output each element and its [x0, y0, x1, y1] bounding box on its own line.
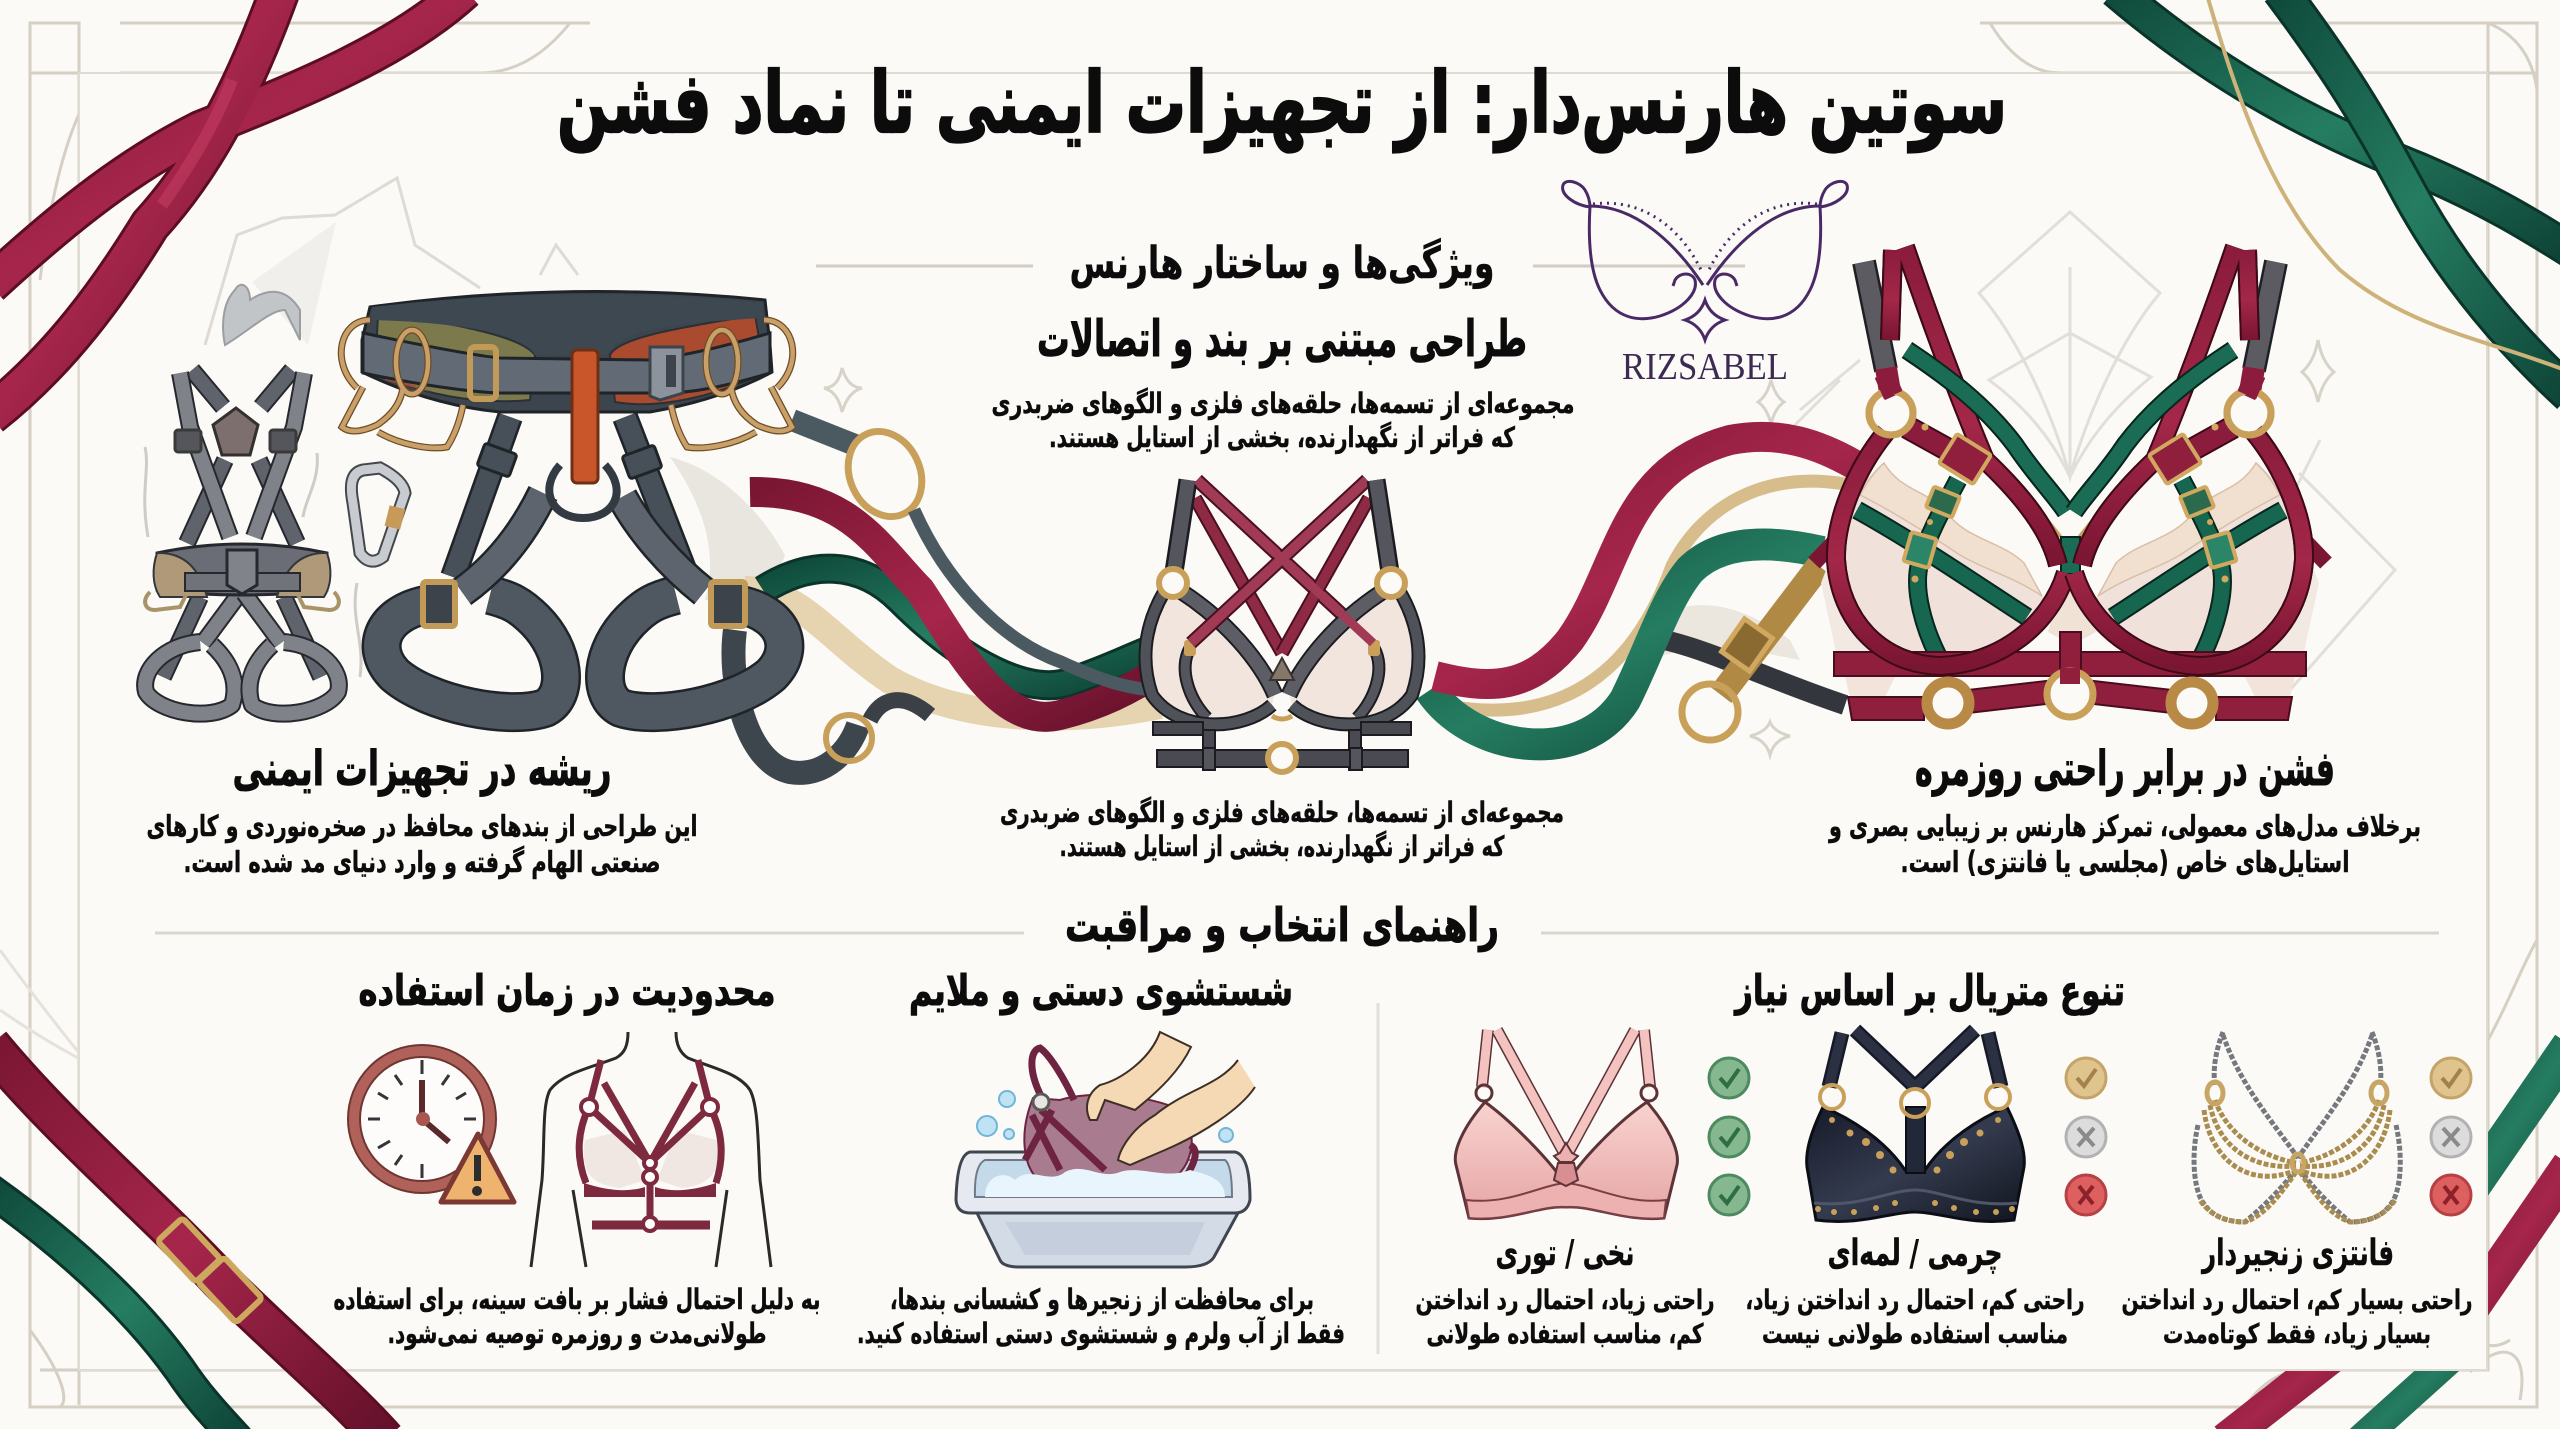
re-drawn underwire over bands [1836, 247, 2304, 666]
leg straps and loops [382, 417, 784, 712]
description: راحتی زیاد، احتمال رد انداختن [1416, 1285, 1714, 1316]
description: این طراحی از بندهای محافظ در صخره‌نوردی و کارهای [146, 809, 698, 843]
logo: Rizsabel [1563, 181, 1847, 388]
block: gentle hand wash [857, 966, 1345, 1350]
block: center caption [1000, 796, 1564, 863]
illustration: main crimson and green harness bra [1814, 247, 2326, 724]
description [1828, 809, 2421, 879]
description: مجموعه‌ای از تسمه‌ها، حلقه‌های فلزی و الگوهای ضربدری [992, 387, 1574, 420]
description: که فراتر از نگهدارنده، بخشی از استایل هستند. [1049, 421, 1516, 454]
label: نخی / توری [1496, 1233, 1634, 1274]
description: صنعتی الهام گرفته و وارد دنیای مد شده است. [184, 845, 660, 879]
illustration: black leather studded bra [1807, 1030, 2024, 1221]
block: roots in safety equipment [146, 741, 698, 879]
description: به دلیل احتمال فشار بر بافت سینه، برای استفاده [334, 1283, 820, 1316]
heading: محدودیت در زمان استفاده [358, 966, 776, 1016]
description [1746, 1285, 2084, 1350]
geometric diamond backdrop [1790, 212, 2395, 690]
illustration: full body harness [145, 370, 339, 714]
block: center caption: که فراتر از نگهدارنده، بخشی از استایل هستند. [1060, 830, 1505, 863]
flowing ribbons right: fashion strand [1430, 437, 1855, 744]
title: سوتین هارنس‌دار: از تجهیزات ایمنی تا نماد فشن [557, 54, 2007, 153]
illustration: fantasy chain bra [2194, 1032, 2400, 1222]
mountain sketch backdrop [145, 178, 578, 677]
description: فقط از آب ولرم و شستشوی دستی استفاده کنید. [857, 1316, 1345, 1350]
waist belt [341, 291, 793, 483]
heading: ریشه در تجهیزات ایمنی [232, 741, 612, 797]
heading: material variety: تنوع متریال بر اساس نیاز [1734, 966, 2125, 1016]
illustration: clock with warning sign [354, 1051, 514, 1202]
comfort icons: chain bra [2431, 1058, 2471, 1215]
illustration: center harness bra [1146, 480, 1418, 772]
block: leather [1746, 1233, 2084, 1350]
description: کم، مناسب استفاده طولانی [1426, 1319, 1704, 1350]
icon: gold belt buckle [157, 1218, 262, 1323]
description [1416, 1285, 1714, 1350]
icon: small sparkles [824, 340, 2334, 755]
illustration: large climbing harness [341, 291, 793, 712]
section divider lines [155, 266, 2439, 1354]
heading: features and structure: ویژگی‌ها و ساختار هارنس [1070, 237, 1494, 289]
gold gear loops [341, 320, 793, 448]
description [2122, 1285, 2472, 1350]
illustration: hand wash basin [956, 1032, 1255, 1267]
ribbon: green top right [2115, 0, 2560, 395]
description [334, 1283, 820, 1350]
description: طولانی‌مدت و روزمره توصیه نمی‌شود. [388, 1317, 766, 1350]
block: fashion versus comfort [1828, 741, 2421, 879]
logo wordmark: RIZSABEL [1622, 346, 1788, 388]
label: فانتزی زنجیردار [2201, 1233, 2394, 1274]
dark strap with ring [733, 419, 1160, 773]
description: بسیار زیاد، فقط کوتاه‌مدت [2163, 1319, 2431, 1350]
heading: شستشوی دستی و ملایم [909, 966, 1293, 1016]
block: cotton lace [1416, 1233, 1714, 1350]
ribbons: bottom right behind panel [2225, 1045, 2560, 1429]
ribbon: crimson top left [0, 0, 465, 415]
block: strap-based design [992, 310, 1574, 454]
illustration: torso with harness [531, 1032, 771, 1267]
comfort icons: pink bra [1709, 1058, 1749, 1215]
description: راحتی کم، احتمال رد انداختن زیاد، [1746, 1285, 2084, 1316]
illustration: pink cotton lace bra [1455, 1030, 1677, 1219]
block: chain fantasy [2122, 1233, 2472, 1350]
description: استایل‌های خاص (مجلسی یا فانتزی) است. [1900, 845, 2350, 879]
icon: carabiner [351, 468, 405, 561]
block: center caption: مجموعه‌ای از تسمه‌ها، حلقه‌های فلزی و الگوهای ضربدری [1000, 796, 1564, 829]
description: مناسب استفاده طولانی نیست [1762, 1319, 2068, 1350]
block: wear time limit [334, 966, 820, 1350]
description [992, 387, 1574, 454]
heading: selection and care guide: راهنمای انتخاب و مراقبت [1065, 898, 1499, 952]
description [857, 1283, 1345, 1350]
flowing ribbons left: safety to fashion [670, 419, 1160, 773]
label: چرمی / لمه‌ای [1828, 1233, 2002, 1274]
description: برای محافظت از زنجیرها و کشسانی بندها، [890, 1283, 1314, 1316]
ribbon: crimson and green bottom left with buckle [0, 1045, 385, 1429]
heading: طراحی مبتنی بر بند و اتصالات [1037, 310, 1527, 369]
description [146, 809, 698, 879]
comfort icons: leather bra [2066, 1058, 2106, 1215]
